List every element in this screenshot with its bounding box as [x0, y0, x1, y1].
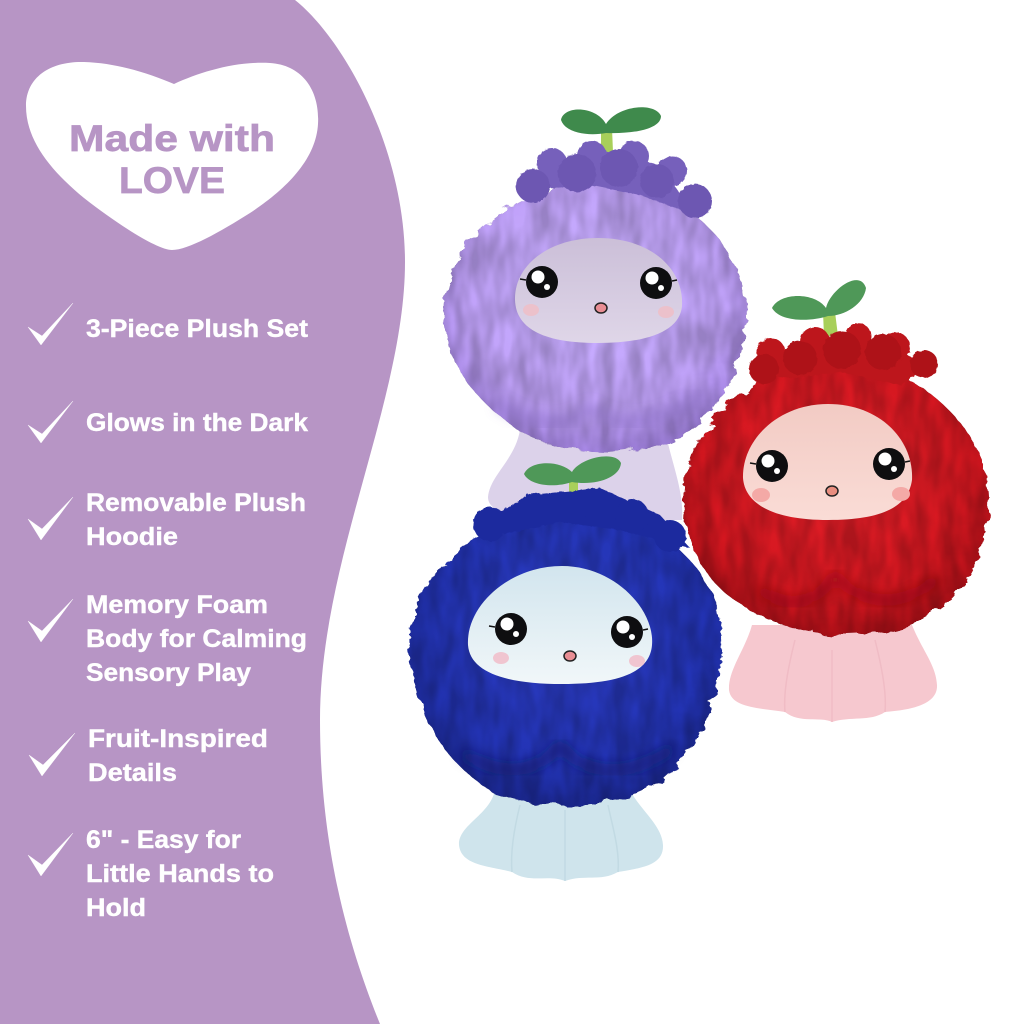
hoodie folds — [465, 745, 670, 770]
feature: easy for little hands: Hold — [86, 894, 146, 922]
feature: 3-piece plush set — [28, 303, 309, 345]
cheeks and mouth — [493, 651, 645, 667]
foot creases — [512, 805, 618, 881]
face — [515, 238, 682, 343]
purple wave panel — [0, 0, 405, 1024]
feature: memory foam body: Body for Calming — [86, 625, 307, 653]
feature: glows in the dark: Glows in the Dark — [86, 409, 308, 437]
sprout — [524, 456, 621, 494]
body — [459, 790, 663, 881]
foot creases — [785, 640, 885, 722]
berries — [473, 488, 690, 552]
feature list — [28, 303, 309, 922]
feature: fruit-inspired details: Details — [88, 759, 177, 787]
plush: red raspberry — [684, 280, 989, 722]
plush: purple grape — [444, 107, 746, 520]
feature: removable plush hoodie: Hoodie — [86, 523, 178, 551]
feature: memory foam body: Memory Foam — [86, 591, 268, 619]
sprout — [772, 280, 866, 336]
feature: fruit-inspired details — [29, 725, 268, 787]
heading: Made with LOVE: Made with — [69, 118, 275, 159]
feature: removable plush hoodie: Removable Plush — [86, 489, 306, 517]
feature: easy for little hands: 6" - Easy for — [86, 826, 241, 854]
hoodie — [684, 362, 989, 635]
cheeks and mouth — [523, 303, 674, 318]
hoodie — [410, 512, 722, 805]
feature: memory foam body: Sensory Play — [86, 659, 251, 687]
sprout — [561, 107, 661, 152]
cheeks and mouth — [752, 486, 910, 502]
feature: fruit-inspired details: Fruit-Inspired — [88, 725, 268, 753]
heading: Made with LOVE: LOVE — [119, 160, 225, 201]
eyes — [750, 448, 910, 482]
berries — [516, 141, 712, 218]
berries — [749, 323, 938, 385]
heading: Made with LOVE — [69, 118, 275, 201]
feature: easy for little hands: Little Hands to — [86, 860, 274, 888]
plush: blue blueberry — [410, 456, 722, 881]
hoodie folds — [760, 575, 935, 602]
eyes — [520, 266, 677, 299]
body — [488, 430, 682, 520]
feature: glows in the dark — [28, 401, 308, 443]
hoodie folds — [500, 395, 700, 422]
feature: removable plush hoodie — [28, 489, 306, 551]
hoodie — [444, 180, 746, 452]
feature: memory foam body — [28, 591, 307, 687]
eyes — [489, 613, 648, 648]
face — [743, 404, 912, 520]
face — [468, 566, 652, 684]
heart badge — [26, 62, 318, 250]
body — [729, 625, 937, 722]
feature: easy for little hands — [28, 826, 274, 922]
feature: 3-piece plush set: 3-Piece Plush Set — [86, 315, 309, 343]
